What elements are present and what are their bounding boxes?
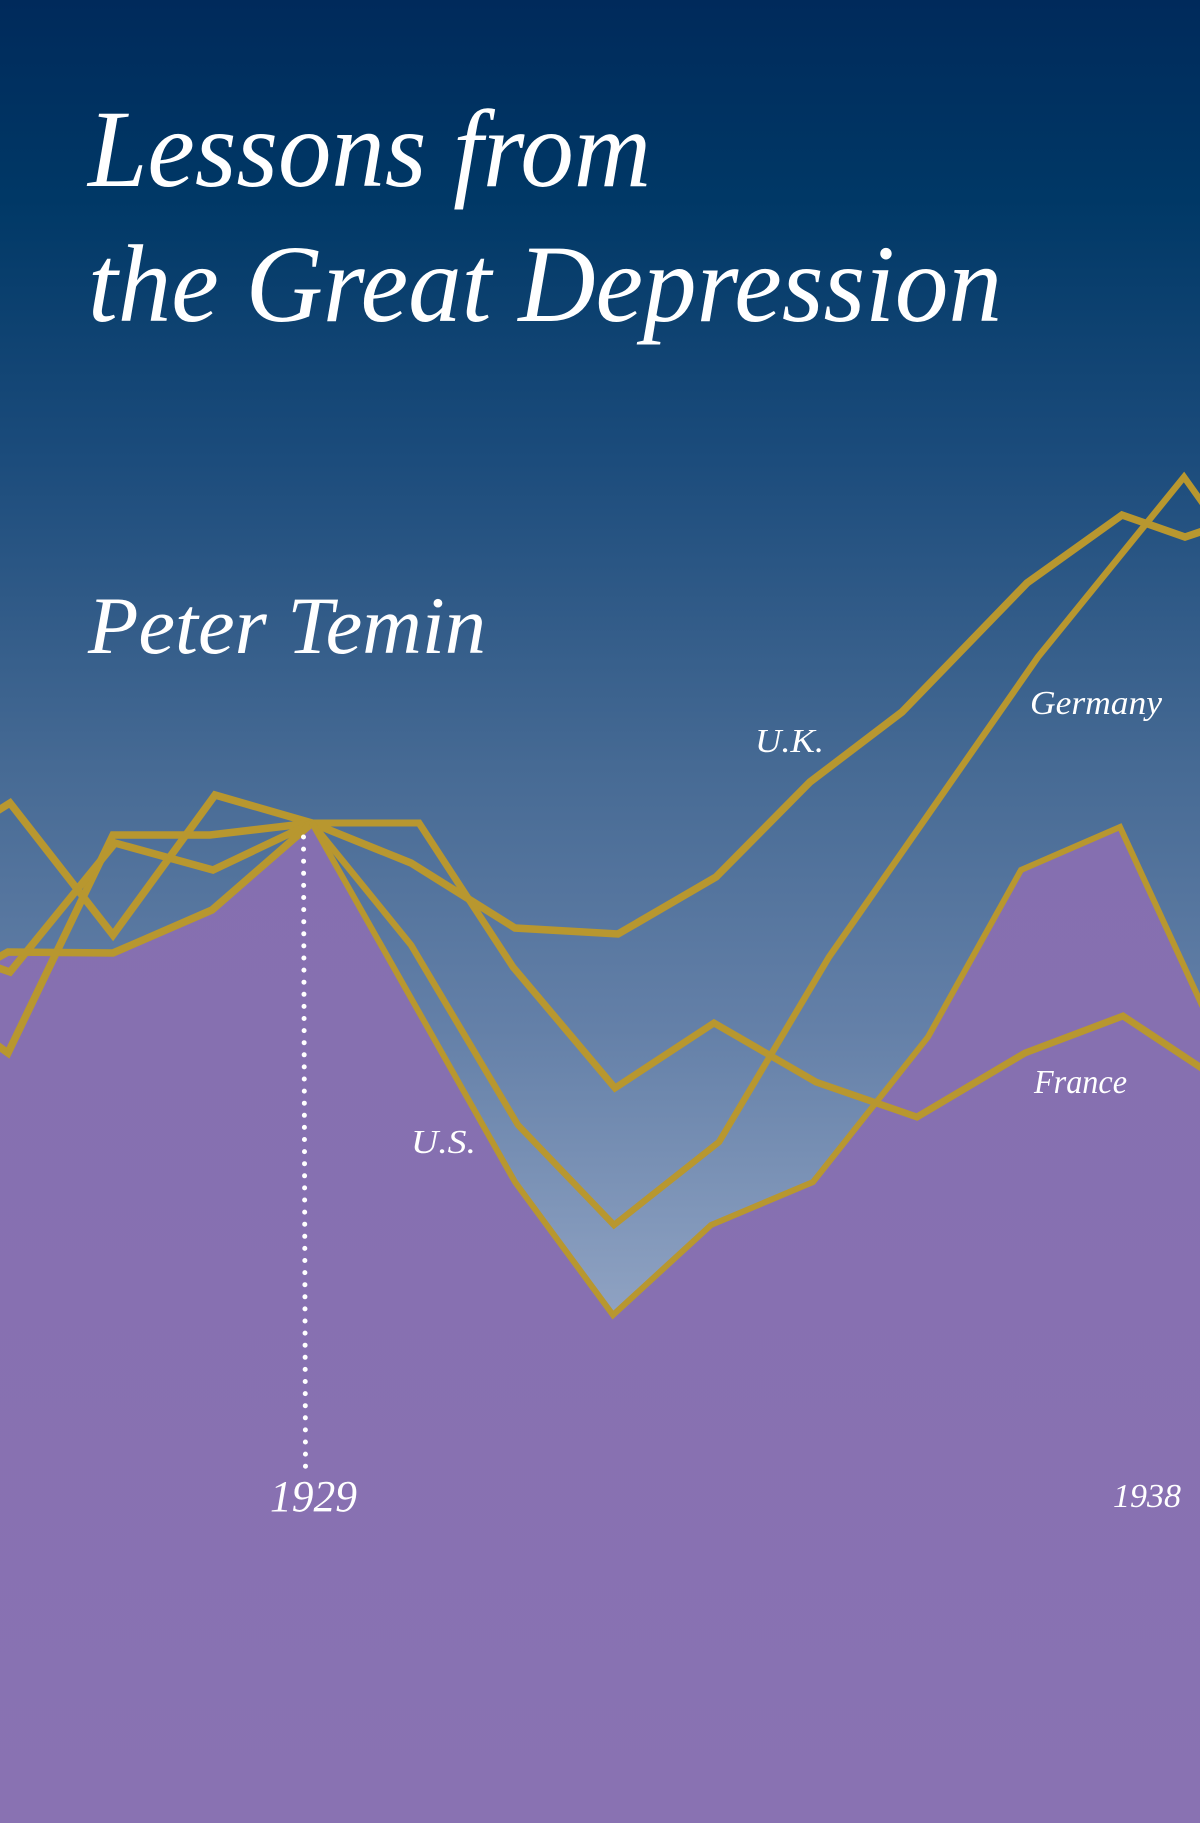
label: France: France — [1033, 1064, 1127, 1101]
line: U.K. — [312, 515, 1200, 934]
line chart — [0, 477, 1200, 1315]
title: Lessons from — [86, 88, 651, 210]
author: Peter Temin — [87, 580, 486, 671]
label: U.S.: U.S. — [411, 1124, 476, 1161]
line: Germany — [312, 477, 1200, 1225]
line: U.S. — [312, 823, 1200, 1315]
label: Germany: Germany — [1030, 685, 1163, 722]
label: U.K.: U.K. — [755, 723, 824, 760]
dotted line marking 1929 — [304, 837, 306, 1472]
year label: 1938: 1938 — [1113, 1478, 1181, 1515]
left series: pre-1929 lines — [0, 795, 312, 1053]
title — [86, 88, 1002, 345]
year label: 1929: 1929 — [270, 1472, 357, 1521]
line: France — [312, 823, 1200, 1117]
title: the Great Depression — [88, 223, 1002, 345]
purple area under the U.S. line — [0, 823, 1200, 1823]
